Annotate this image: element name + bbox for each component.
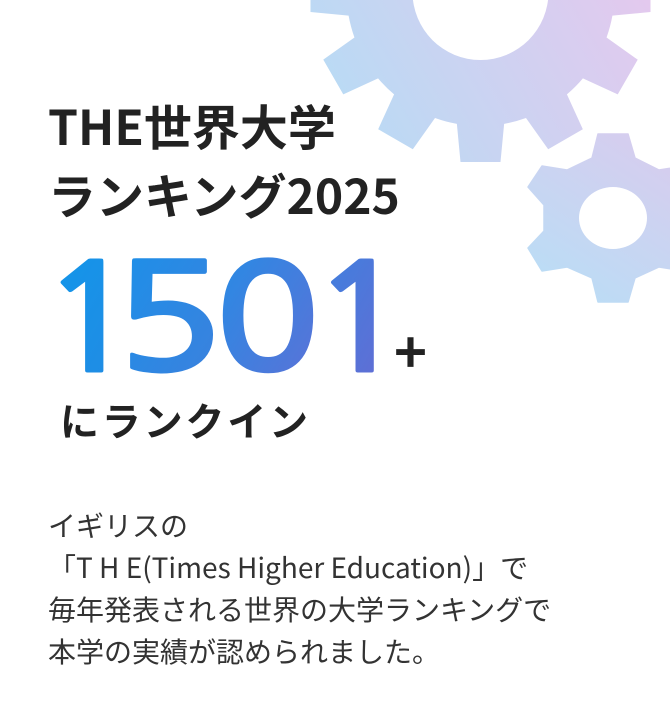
icon: gears <box>310 0 670 303</box>
big number 1501: 0 <box>213 246 322 395</box>
title <box>48 89 400 228</box>
plus sign: + <box>394 309 427 390</box>
title: ランキング2025 <box>48 158 400 228</box>
big number 1501: 1 <box>39 246 142 394</box>
description text <box>48 505 551 671</box>
description text: 本学の実績が認められました。 <box>48 631 440 671</box>
description text: イギリスの <box>48 505 188 545</box>
title: THE世界大学 <box>48 89 336 159</box>
description text: 毎年発表される世界の大学ランキングで <box>48 589 551 629</box>
big number 1501: 1 <box>309 246 413 394</box>
icon: large gear <box>310 0 650 162</box>
ranked-in label: にランクイン <box>60 392 311 448</box>
description text: 「T H E(Times Higher Education)」で <box>48 547 528 587</box>
icon: small gear <box>528 134 670 302</box>
big number 1501: 5 <box>112 247 225 395</box>
